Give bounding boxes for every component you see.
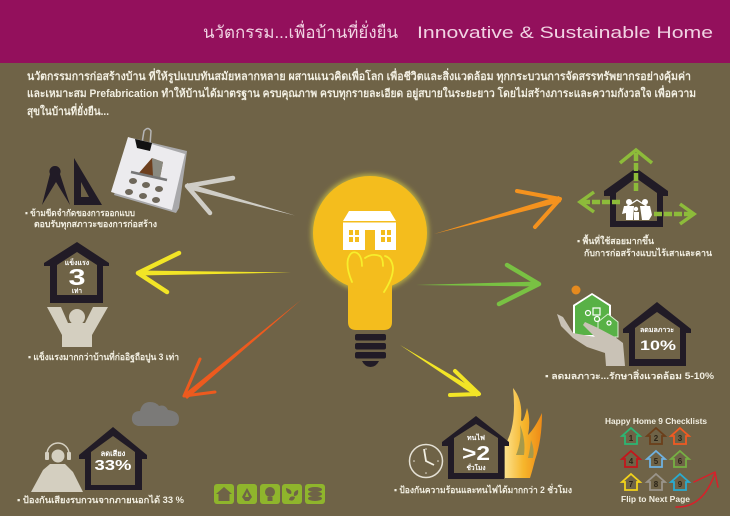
arrow: flip: [676, 472, 718, 507]
intro paragraph: และเหมาะสม Prefabrication ทำให้บ้านได้มาตรฐาน ครบคุณภาพ ครบทุกรายละเอียด อยู่สบายในระยะยาว โดยไม่สร้างภาระและความกังวลใจ เพื่อความ: [27, 85, 696, 101]
intro paragraph: นวัตกรรมการก่อสร้างบ้าน ที่ให้รูปแบบทันสมัยหลากหลาย ผสานแนวคิดเพื่อโลก เพื่อชีวิตและสิ่งแวดล้อม ทุกกระบวนการจัดสรรทรัพยากรอย่างคุ้มค่า: [27, 68, 691, 84]
icon: set square: [74, 158, 102, 205]
icon: house 3x: [44, 242, 109, 303]
icon: family: [622, 199, 652, 220]
arrow: yellow to strength: [138, 253, 291, 292]
house label: 33%: [94, 457, 132, 474]
house label: 10%: [640, 337, 677, 353]
caption: [25, 208, 157, 230]
panel: noise: [17, 402, 184, 505]
arrows: expanding space: [580, 150, 694, 224]
caption: ตอบรับทุกสภาวะของการก่อสร้าง: [34, 219, 157, 230]
checklist numbers: 6: [678, 457, 683, 466]
icon: green houses: [573, 293, 618, 337]
panel: more space: [577, 150, 713, 258]
house label: ลดเสียง: [101, 449, 126, 458]
caption: ▪ ลดมลภาวะ...รักษาสิ่งแวดล้อม 5-10%: [545, 369, 714, 381]
caption: [577, 234, 713, 258]
house label: ทนไฟ: [467, 433, 485, 442]
house label: ลดมลภาวะ: [640, 327, 674, 334]
flip label: Flip to Next Page: [621, 495, 691, 504]
arrow: orange to space: [434, 191, 561, 234]
checklist numbers: [629, 434, 683, 489]
checklist numbers: 3: [678, 434, 683, 443]
intro paragraph: สุขในบ้านที่ยั่งยืน...: [27, 103, 109, 119]
icon: clock: [410, 444, 442, 478]
icon: house in bulb: [343, 211, 396, 250]
icon: house 33%: [79, 427, 147, 490]
house label: [640, 327, 677, 353]
title: นวัตกรรม...เพื่อบ้านที่ยั่งยืน: [203, 20, 398, 42]
house label: >2: [462, 443, 490, 465]
icon: clipped blueprint paper: [111, 128, 187, 213]
icon: house >2 hours: [442, 416, 509, 479]
intro paragraph: [27, 68, 696, 119]
caption: ▪ แข็งแรงมากกว่าบ้านที่ก่ออิฐถือปูน 3 เท่า: [28, 350, 179, 363]
checklist numbers: 9: [678, 480, 683, 489]
checklist numbers: 2: [654, 434, 659, 443]
caption: ▪ พื้นที่ใช้สอยมากขึ้น: [577, 234, 655, 246]
icon: sun: [572, 286, 580, 294]
icon: flames: [505, 388, 542, 478]
arrow: yellow to fire: [400, 345, 480, 397]
arrow: grey to design: [187, 178, 295, 216]
house label: [462, 433, 490, 472]
caption: ▪ ข้ามขีดจำกัดของการออกแบบ: [25, 208, 135, 218]
house label: เท่า: [72, 287, 82, 295]
panel: strength: [28, 242, 179, 363]
green icon row: [214, 484, 325, 504]
icon: compass: [42, 166, 70, 205]
house label: แข็งแรง: [65, 258, 90, 267]
checklist numbers: 7: [629, 480, 634, 489]
icon: hand: [557, 314, 625, 366]
house label: [94, 449, 132, 474]
house label: 3: [68, 264, 86, 290]
panel: fire resistance: [394, 388, 572, 495]
header band: [0, 0, 730, 63]
arrow: green to environment: [416, 265, 539, 304]
bulb screw base: [355, 334, 386, 367]
icon: person with headphones: [31, 443, 83, 492]
house label: ชั่วโมง: [466, 462, 486, 472]
panel: environment: [545, 286, 714, 381]
checklist numbers: 4: [629, 457, 634, 466]
panel: design freedom: [25, 128, 187, 230]
checklist numbers: 1: [629, 434, 634, 443]
arrow: orange-red to noise: [183, 300, 301, 399]
caption: ▪ ป้องกันเสียงรบกวนจากภายนอกได้ 33 %: [17, 494, 184, 505]
icon: house 10%: [623, 302, 691, 366]
icon: person lifting: [47, 307, 108, 347]
house label: [65, 258, 90, 295]
panel: happy home 9 checklists: [605, 417, 718, 507]
title: Innovative & Sustainable Home: [417, 23, 713, 42]
title: [203, 20, 713, 42]
heading: Happy Home 9 Checklists: [605, 417, 708, 426]
checklist houses: [622, 428, 689, 490]
bulb filament: [348, 252, 393, 292]
caption: ▪ ป้องกันความร้อนและทนไฟได้มากกว่า 2 ชั่วโมง: [394, 483, 572, 495]
icon: house with family: [604, 168, 668, 227]
light bulb: [311, 174, 429, 367]
checklist numbers: 8: [654, 480, 659, 489]
checklist numbers: 5: [654, 457, 659, 466]
caption: กับการก่อสร้างแบบไร้เสาและคาน: [584, 247, 713, 258]
icon: cloud: [132, 402, 179, 426]
